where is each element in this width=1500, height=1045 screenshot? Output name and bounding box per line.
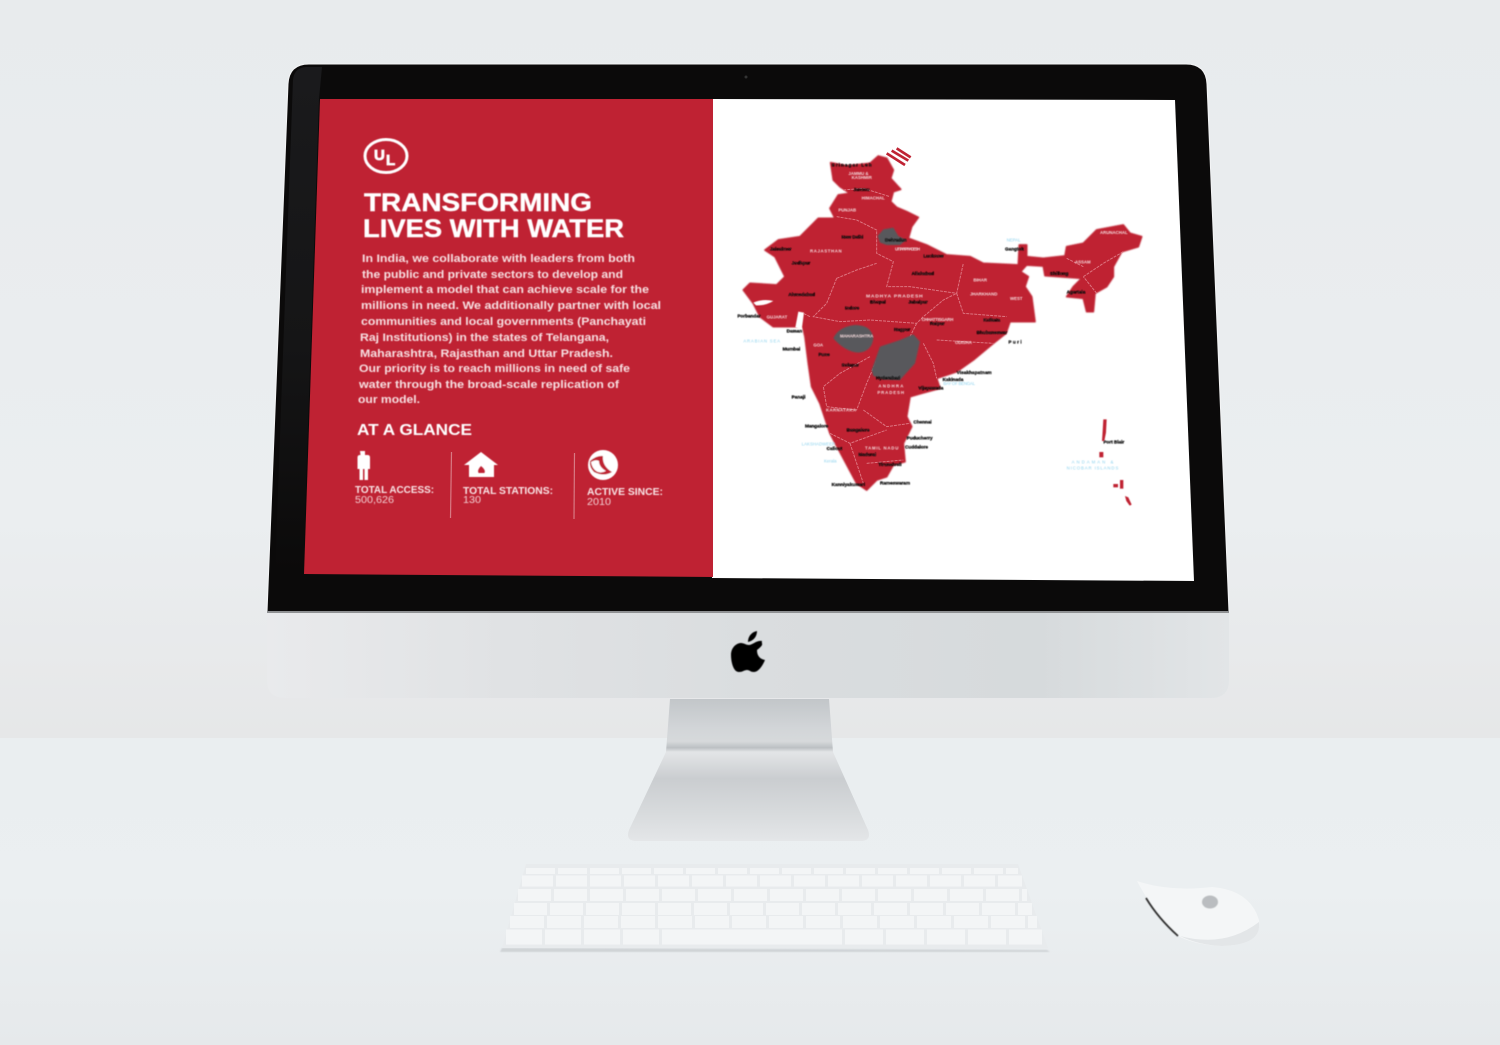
city labels: Visakhapatnam <box>957 370 992 375</box>
city labels: Ahmedabad <box>788 292 815 297</box>
map outline <box>743 156 1142 490</box>
state labels: RAJASTHAN <box>810 249 842 254</box>
state labels: ANDHRA <box>878 383 904 388</box>
state labels: ARUNACHAL <box>1100 230 1128 235</box>
state labels: KARNATAKA <box>826 408 857 413</box>
apple logo <box>731 631 765 672</box>
city labels: Mangalore <box>805 423 829 428</box>
city labels: New Delhi <box>842 234 863 239</box>
total stations value: 130 <box>463 495 481 506</box>
intro paragraph: Maharashtra, Rajasthan and Uttar Pradesh. <box>360 348 613 360</box>
city labels <box>737 163 1124 487</box>
city labels: Bhopal <box>870 299 886 304</box>
intro paragraph: Our priority is to reach millions in need of safe <box>359 363 630 375</box>
total stations label: TOTAL STATIONS: <box>463 486 553 497</box>
state labels: UTTAR PRADESH <box>895 247 920 252</box>
state labels: HIMACHAL <box>862 195 885 200</box>
city labels: Puducherry <box>907 435 933 440</box>
city labels: Lucknow <box>923 253 944 258</box>
city labels: Allahabad <box>912 271 934 276</box>
sea labels: NICOBAR ISLANDS <box>1067 465 1118 470</box>
keyboard <box>500 864 1050 952</box>
screen red panel <box>304 99 713 577</box>
stat: active since <box>587 450 663 508</box>
city labels: Gangtok <box>1005 247 1024 252</box>
stat: total access <box>355 451 434 506</box>
sea labels: ANDAMAN & <box>1072 459 1113 464</box>
stat dividers <box>450 452 574 519</box>
state labels: GUJARAT <box>767 315 788 320</box>
intro paragraph: In India, we collaborate with leaders from both <box>362 253 635 265</box>
highlighted region: north <box>878 228 906 245</box>
screen white panel <box>712 99 1194 581</box>
city labels: Pune <box>818 352 830 357</box>
sea labels: NEPAL <box>1007 238 1021 243</box>
gulf of khambhat <box>795 312 804 330</box>
key rows <box>506 871 1042 937</box>
gulf of kutch <box>753 300 773 305</box>
city labels: Calicut <box>827 446 843 451</box>
monitor chin <box>267 612 1229 698</box>
city labels: Chennai <box>913 419 932 424</box>
city labels: Agartala <box>1067 289 1086 294</box>
icon: house with drop <box>464 452 498 477</box>
city labels: Kanniyakumari <box>832 482 865 487</box>
city labels: Dehradun <box>885 238 907 243</box>
title <box>363 189 624 243</box>
mouse shade <box>1180 922 1259 946</box>
state labels: ASSAM <box>1075 259 1091 264</box>
state labels: ODISHA <box>955 340 973 345</box>
total access value: 500,626 <box>355 495 394 506</box>
wall background <box>0 0 1500 738</box>
mouse body <box>1137 881 1259 946</box>
at a glance heading: AT A GLANCE <box>357 422 472 439</box>
city labels: Jammu <box>853 187 870 192</box>
city labels: Bangalore <box>847 428 870 433</box>
city labels: Rameswaram <box>880 480 910 485</box>
city labels: Indore <box>845 305 860 310</box>
state labels: TAMIL NADU <box>865 445 898 450</box>
sea labels: Kerala <box>824 459 837 464</box>
icon: person <box>358 451 370 480</box>
intro paragraph: the public and private sectors to develop and <box>362 269 623 281</box>
icon: clock <box>588 450 618 480</box>
mouse apple logo <box>1202 896 1218 908</box>
UL logo: U <box>374 147 385 164</box>
stand neck <box>666 699 833 752</box>
city labels: Bhubaneswar <box>977 330 1007 335</box>
highlighted region: maharashtra <box>833 325 873 353</box>
camera dot <box>744 76 748 78</box>
intro paragraph: millions in need. We additionally partner with local <box>361 300 661 312</box>
sea labels: ARABIAN SEA <box>743 339 780 344</box>
bezel left sheen <box>275 67 322 574</box>
bezel bottom edge <box>267 611 1229 613</box>
state labels: MADHYA PRADESH <box>866 294 923 300</box>
UL logo: L <box>386 152 395 169</box>
state labels: JHARKHAND <box>970 292 997 297</box>
state labels: PUNJAB <box>838 208 856 213</box>
stand foot <box>628 752 869 841</box>
state labels <box>767 171 1128 450</box>
desk surface <box>0 738 1500 1045</box>
state labels: GOA <box>813 343 824 348</box>
disputed area stripes <box>887 148 911 165</box>
city labels: Raipur <box>930 321 945 326</box>
monitor <box>267 64 1229 698</box>
keyboard shadow <box>500 948 1050 952</box>
intro paragraph: communities and local governments (Panchayati <box>361 316 646 328</box>
stat: total stations <box>463 452 553 506</box>
city labels: Panaji <box>792 394 805 399</box>
intro paragraph <box>358 253 661 406</box>
city labels: Jabalpur <box>908 299 928 304</box>
state labels: BIHAR <box>973 278 988 283</box>
state labels: CHHATTISGARH <box>922 317 953 322</box>
title: LIVES WITH WATER <box>363 215 624 243</box>
city labels: Daman <box>787 328 802 333</box>
city labels: Jaisalmer <box>770 247 792 252</box>
city labels: Vijayawada <box>918 385 944 390</box>
state labels: WEST <box>1010 296 1023 301</box>
title: TRANSFORMING <box>364 189 592 217</box>
city labels: Jodhpur <box>792 260 810 265</box>
city labels: Shillong <box>1050 271 1069 276</box>
city labels: Kolkata <box>983 318 1001 323</box>
active since value: 2010 <box>587 497 611 508</box>
andaman and nicobar islands <box>1099 419 1132 506</box>
state labels: PRADESH <box>877 390 904 395</box>
intro paragraph: water through the broad-scale replication of <box>358 379 619 391</box>
keyboard body <box>502 864 1048 948</box>
city labels: Nagpur <box>894 327 910 332</box>
monitor bezel <box>267 64 1229 612</box>
city labels: Mumbai <box>783 347 800 352</box>
city labels: Srinagar Leh <box>832 163 872 168</box>
intro paragraph: our model. <box>358 394 420 406</box>
state labels: KASHMIR <box>852 175 873 180</box>
sea labels: LAKSHADWEEP <box>802 442 835 447</box>
UL logo <box>365 140 407 172</box>
active since label: ACTIVE SINCE: <box>587 487 663 498</box>
city labels: Cuddalore <box>905 444 928 449</box>
city labels: Hyderabad <box>876 375 900 380</box>
city labels: Tirunelveli <box>878 462 902 467</box>
city labels: Solapur <box>842 363 859 368</box>
sea labels <box>743 238 1118 470</box>
monitor stand <box>628 699 869 841</box>
intro paragraph: implement a model that can achieve scale for the <box>361 284 649 296</box>
mouse dark edge <box>1146 898 1178 936</box>
total access label: TOTAL ACCESS: <box>355 485 434 496</box>
state labels: MAHARASHTRA <box>840 334 874 339</box>
city labels: Kakinada <box>943 377 964 382</box>
highlighted region: telangana <box>872 334 920 380</box>
city labels: Puri <box>1008 339 1022 344</box>
city labels: Port Blair <box>1103 439 1124 444</box>
city labels: Madurai <box>858 452 876 457</box>
mouse <box>1137 881 1259 946</box>
sea labels: BAY OF BENGAL <box>943 381 976 386</box>
city labels: Porbandar <box>737 314 761 319</box>
state labels: JAMMU & <box>848 171 869 176</box>
intro paragraph: Raj Institutions) in the states of Telangana, <box>360 332 609 344</box>
india map <box>737 148 1142 506</box>
state borders <box>803 188 1123 483</box>
